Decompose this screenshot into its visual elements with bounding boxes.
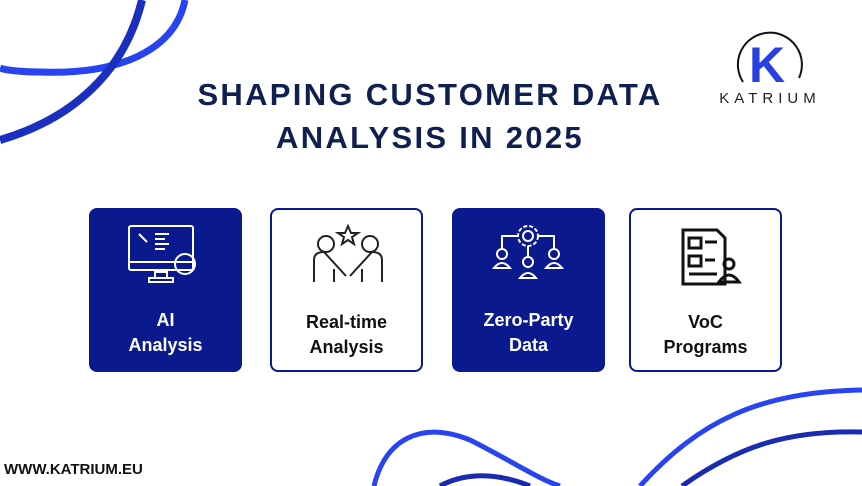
icon: gear network: [492, 225, 564, 279]
icon: checklist: [682, 228, 742, 286]
card: VoC Programs: VoC: [688, 312, 723, 332]
card: Real-time Analysis: Analysis: [309, 337, 384, 357]
icon: handshake: [313, 224, 383, 282]
footer url: WWW.KATRIUM.EU: [4, 461, 143, 478]
card: Real-time Analysis: [270, 208, 423, 372]
title: [197, 77, 663, 155]
card: Zero-Party Data: Data: [509, 335, 548, 355]
card: AI Analysis: AI: [156, 310, 174, 330]
logo: KATRIUM: [719, 90, 821, 107]
card: VoC Programs: [629, 208, 782, 372]
icon: monitor: [128, 225, 196, 283]
card: AI Analysis: [89, 208, 242, 372]
title: ANALYSIS IN 2025: [276, 120, 584, 155]
card: VoC Programs: Programs: [663, 337, 748, 357]
card: Zero-Party Data: [452, 208, 605, 372]
card: Real-time Analysis: Real-time: [306, 312, 387, 332]
title: SHAPING CUSTOMER DATA: [197, 77, 663, 112]
decorative curves top-left: [0, 0, 188, 144]
card: Zero-Party Data: Zero-Party: [483, 310, 574, 330]
logo: [719, 32, 821, 107]
card: AI Analysis: Analysis: [128, 335, 203, 355]
